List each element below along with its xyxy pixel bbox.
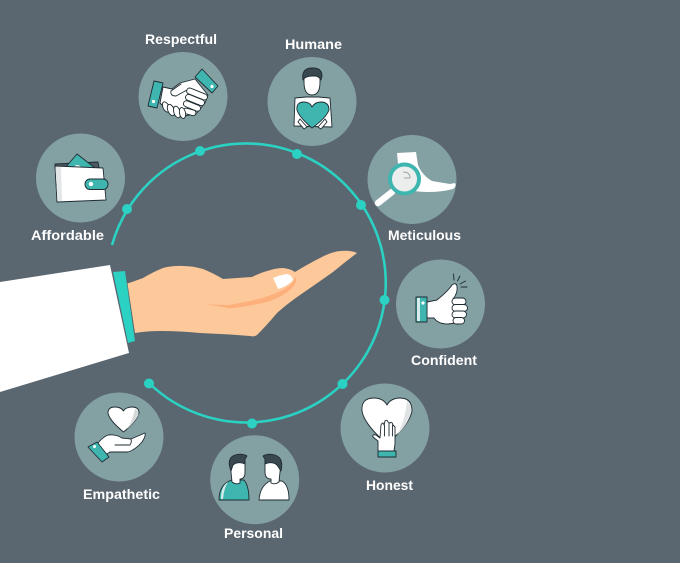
label: Honest bbox=[366, 477, 413, 493]
label: Respectful bbox=[145, 31, 217, 47]
label: Confident bbox=[411, 352, 477, 368]
item: Affordable bbox=[31, 134, 125, 243]
sleeve bbox=[0, 265, 129, 392]
icon: wallet bbox=[55, 154, 108, 202]
icon: foot under magnifier bbox=[378, 152, 456, 203]
label: Personal bbox=[224, 525, 283, 541]
item: Meticulous bbox=[368, 135, 461, 243]
item: Confident bbox=[396, 260, 485, 368]
label: Meticulous bbox=[388, 227, 461, 243]
icon: person holding heart bbox=[294, 68, 332, 129]
item: Humane bbox=[268, 36, 356, 146]
item: Honest bbox=[340, 384, 430, 493]
icon: thumbs up bbox=[416, 274, 468, 324]
icon: hand holding heart bbox=[88, 407, 145, 462]
doctor's arm and hand bbox=[0, 251, 357, 392]
icon: handshake bbox=[148, 69, 218, 119]
label: Affordable bbox=[31, 227, 104, 243]
ring with dots bbox=[112, 143, 390, 428]
icon: two people bbox=[219, 454, 289, 500]
item: Respectful bbox=[138, 31, 228, 141]
icon: hand on heart bbox=[362, 398, 412, 457]
item: Personal bbox=[210, 435, 299, 541]
thumbnail bbox=[273, 274, 293, 289]
item: Empathetic bbox=[74, 392, 164, 502]
cuff bbox=[113, 271, 135, 343]
hand bbox=[128, 251, 357, 336]
label: Humane bbox=[285, 36, 342, 52]
label: Empathetic bbox=[83, 486, 160, 502]
thumb crease bbox=[205, 276, 296, 308]
